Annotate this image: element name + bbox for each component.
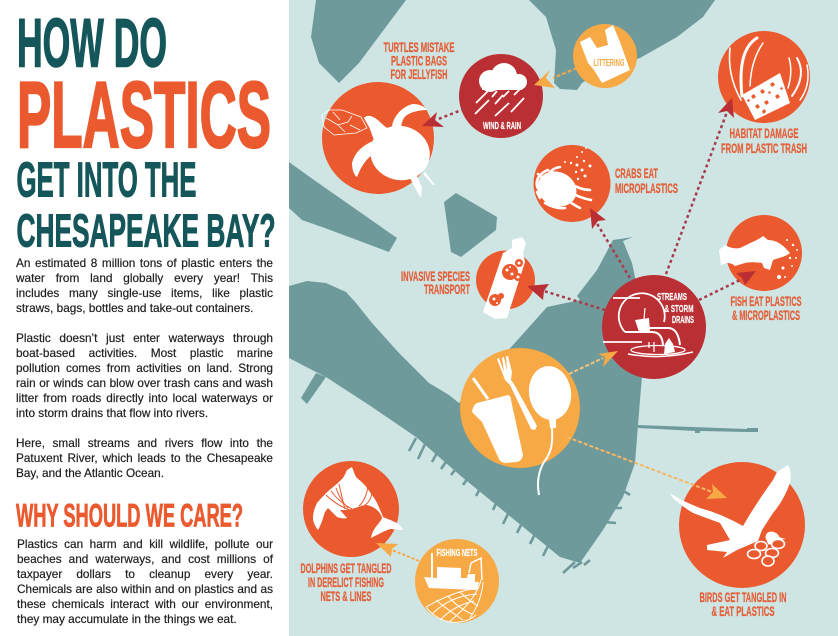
heading: turtles <box>384 40 454 82</box>
circle: fish <box>726 215 802 291</box>
arrow: wind and rain to turtles <box>422 109 464 127</box>
icon: cup and straw <box>472 378 523 463</box>
label: fishing nets: FISHING NETS <box>436 547 478 559</box>
arrow: littering to wind and rain <box>534 68 577 88</box>
text block: land based sources: pollution comes from activities on land. Strong <box>16 361 273 375</box>
circle: wind and rain <box>459 54 543 138</box>
text block: intro paragraph: straws, bags, bottles and take-out containers. <box>16 301 253 315</box>
map background <box>289 0 838 636</box>
label: streams: & STORM <box>664 303 694 315</box>
heading: turtles: PLASTIC BAGS <box>391 54 447 68</box>
text block: why care: Plastics can harm and kill wildlife, pollute our <box>17 537 273 551</box>
icon: microplastic dots <box>564 147 592 180</box>
text block: patuxent river: Bay, and the Atlantic Ocean. <box>16 466 164 480</box>
arrow: plastic items to birds <box>567 437 727 499</box>
label: birds <box>700 590 786 619</box>
circle: crabs <box>534 145 610 222</box>
circle: dolphins <box>303 461 399 557</box>
icon: sea turtle <box>352 104 436 198</box>
text block: patuxent river <box>16 436 273 480</box>
text block: intro paragraph <box>16 256 273 315</box>
arrow: streams to fish <box>699 271 756 300</box>
text block: why care <box>17 537 274 626</box>
panel: fish eat plastics <box>719 215 802 323</box>
label: streams: STREAMS <box>657 291 687 303</box>
arrow: streams to invasive species <box>527 284 605 310</box>
icon: rain cloud <box>479 63 527 92</box>
label: dolphins: IN DERELICT FISHING <box>308 575 384 590</box>
title: CHESAPEAKE BAY? <box>16 204 276 256</box>
land masses <box>289 0 758 573</box>
text block: why care: Chemicals are also within and on plastics and as <box>17 582 273 596</box>
icon: bottle <box>483 237 526 319</box>
circle: birds <box>679 462 805 588</box>
text block: land based sources: boat-based activities. Most plastic marine <box>16 346 273 360</box>
circle: plastic items <box>460 348 580 468</box>
label: wind and rain: WIND & RAIN <box>483 120 521 132</box>
text block: why care: they may accumulate in the things we eat. <box>17 612 237 626</box>
panel: littering <box>573 24 637 88</box>
icon: bird <box>670 465 791 558</box>
heading: turtles: FOR JELLYFISH <box>390 67 448 82</box>
label: dolphins: DOLPHINS GET TANGLED <box>300 561 392 576</box>
label: streams: DRAINS <box>672 314 694 326</box>
text block: why care: these chemicals interact with our environment, <box>17 597 273 611</box>
icon: plastic dots near fish <box>777 239 798 279</box>
icon: sea grass <box>729 38 808 100</box>
icon: dolphin <box>313 467 403 538</box>
text block: why care: beaches and waterways, and cost millions of <box>17 552 273 566</box>
arrow: fishing nets to dolphins <box>376 543 419 561</box>
panel: wind and rain <box>459 54 543 138</box>
label: crabs <box>615 166 678 196</box>
icon: storm drain <box>603 293 693 357</box>
label: dolphins: NETS & LINES <box>320 589 372 604</box>
label: fish <box>730 294 802 323</box>
icon: fork <box>497 356 537 430</box>
text block: why care: taxpayer dollars to cleanup every year. <box>17 567 273 581</box>
text block: intro paragraph: water from land globally every year! This <box>16 271 273 285</box>
label: crabs: CRABS EAT <box>615 166 658 181</box>
panel: habitat damage <box>718 31 810 156</box>
label: crabs: MICROPLASTICS <box>615 181 678 196</box>
icon: rain streaks <box>475 89 524 116</box>
text block: land based sources: litter from roads directly into local waterways or <box>16 391 273 405</box>
panel: turtles mistake plastic bags <box>322 40 454 198</box>
text block: land based sources: Plastic doesn’t just enter waterways through <box>16 331 273 345</box>
label: invasive <box>401 269 470 297</box>
circle: streams <box>602 275 706 379</box>
icon: bird head <box>765 531 788 545</box>
icon: fishing boat <box>424 553 482 590</box>
heading: turtles: TURTLES MISTAKE <box>384 40 454 55</box>
title: HOW DO <box>17 4 167 82</box>
heading: why should we care: WHY SHOULD WE CARE? <box>16 498 243 534</box>
text block: intro paragraph: An estimated 8 million tons of plastic enters the <box>16 256 273 270</box>
circle: turtles <box>322 82 434 194</box>
label: streams <box>657 291 694 326</box>
title: GET INTO THE <box>16 154 196 208</box>
label: dolphins <box>300 561 392 604</box>
arrow: streams to crabs <box>590 208 633 283</box>
arrow: plastic items to streams <box>569 351 618 374</box>
text block: intro paragraph: includes many single-use items, like plastic <box>16 286 273 300</box>
text block: land based sources <box>16 331 273 420</box>
text block: land based sources: into storm drains that flow into rivers. <box>16 406 208 420</box>
icon: plastic bag outline <box>322 110 367 135</box>
panel: plastic items <box>460 348 580 495</box>
title: PLASTICS <box>17 62 271 167</box>
circle: habitat <box>718 31 810 123</box>
icon: net <box>426 580 483 622</box>
panel: streams and storm drains <box>602 275 706 379</box>
icon: plastic crate <box>742 73 790 120</box>
panel: fishing nets <box>415 539 499 623</box>
panel: crabs eat microplastics <box>532 145 678 222</box>
label: habitat damage <box>721 126 807 156</box>
icon: fishing lines on dolphin <box>326 484 372 510</box>
text block: land based sources: rain or winds can blow over trash cans and wash <box>16 376 273 390</box>
label: invasive: INVASIVE SPECIES <box>401 269 470 284</box>
panel: invasive species transport <box>401 237 535 319</box>
title <box>16 4 276 256</box>
arrow: streams to habitat <box>666 98 734 274</box>
label: invasive: TRANSPORT <box>424 282 470 297</box>
icon: balloon <box>525 363 575 495</box>
circle: fishing nets <box>415 539 499 623</box>
icon: plastic bag <box>580 25 630 83</box>
icon: fish <box>719 236 790 270</box>
text block: patuxent river: Patuxent River, which leads to the Chesapeake <box>16 451 273 465</box>
icon: crab <box>532 165 591 213</box>
icon: six-pack rings <box>748 540 784 566</box>
label: birds: & EAT PLASTICS <box>712 604 774 619</box>
label: littering: LITTERING <box>594 57 624 69</box>
panel: birds <box>670 462 805 619</box>
panel: dolphins <box>300 461 403 604</box>
circle: invasive <box>476 250 535 310</box>
text block: patuxent river: Here, small streams and rivers flow into the <box>16 436 273 450</box>
circle: littering <box>573 24 637 88</box>
